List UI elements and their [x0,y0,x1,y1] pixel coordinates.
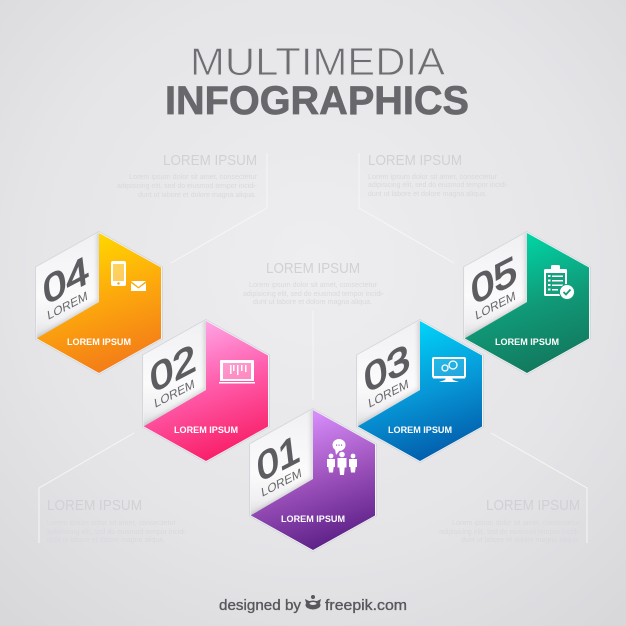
icon: freepik logo [305,595,321,610]
text block: bottom left: dunt ut labore et dolore magna aliqua. [47,537,165,544]
caption: LOREM IPSUM [281,514,345,525]
text block: bottom right: LOREM IPSUM [486,497,580,514]
hexagon 04: orange [36,232,162,374]
text block: bottom left [47,497,188,544]
text block: center: Lorem ipsum dolor sit amet, consectetur [249,282,378,289]
text block: bottom right: dunt ut labore et dolore magna aliqua. [461,537,580,544]
text block: top left [117,152,258,199]
footer credit: freepik.com [325,598,407,614]
label: LOREM [474,288,516,323]
text block: top right: Lorem ipsum dolor sit amet, consectetur [368,174,498,181]
text block: top left: Lorem ipsum dolor sit amet, consectetur [129,174,258,181]
title: INFOGRAPHICS [165,79,469,123]
footer credit: designed by [219,598,302,614]
icon: laptop [219,360,255,384]
title [165,41,469,123]
number: 05 [469,247,519,313]
text block: top right: adipisicing elit, sed do eiusmod tempor incidi- [368,182,509,189]
title: MULTIMEDIA [190,41,445,84]
text block: bottom left: LOREM IPSUM [47,497,142,514]
number: 03 [362,335,412,401]
text block: bottom left: Lorem ipsum dolor sit amet, consectetur [47,520,177,527]
text block: bottom right: adipisicing elit, sed do eiusmod tempor incidi- [439,529,581,536]
number: 04 [41,247,91,313]
text block: top right: dunt ut labore et dolore magna aliqua. [368,191,487,198]
label: LOREM [46,288,88,323]
text block: top right: LOREM IPSUM [368,152,462,169]
icon: phone and envelope [111,261,146,291]
text block: bottom left: adipisicing elit, sed do eiusmod tempor incidi- [47,529,188,536]
number: 02 [148,335,198,401]
text block: center: LOREM IPSUM [266,260,360,277]
text block: center: dunt ut labore et dolore magna aliqua. [253,299,372,306]
footer credit [219,595,407,614]
hexagon 03: blue [356,320,484,462]
text block: center: adipisicing elit, sed do eiusmod tempor incidi- [243,291,385,298]
icon: monitor with gears [433,358,465,382]
text block: top right [368,152,509,198]
label: LOREM [260,465,302,500]
text block: bottom right [439,497,581,544]
caption: LOREM IPSUM [67,337,131,348]
number: 01 [255,426,302,490]
text block: top left: LOREM IPSUM [163,152,257,169]
text block: top left: dunt ut labore et dolore magna aliqua. [138,192,256,199]
hexagon 02: pink [142,320,270,462]
label: LOREM [367,376,409,411]
caption: LOREM IPSUM [495,337,559,348]
label: LOREM [153,376,195,411]
icon: people with speech bubble [327,439,357,475]
hexagon 01: purple [250,408,376,552]
hexagon 05: green [464,232,590,374]
text block: bottom right: Lorem ipsum dolor sit amet, consectetur [452,520,581,527]
icon: clipboard with check [544,265,574,300]
text block: center [243,260,385,306]
caption: LOREM IPSUM [174,425,238,436]
connector lines [39,153,587,543]
text block: top left: adipisicing elit, sed do eiusmod tempor incidi- [117,183,258,190]
caption: LOREM IPSUM [388,425,452,436]
